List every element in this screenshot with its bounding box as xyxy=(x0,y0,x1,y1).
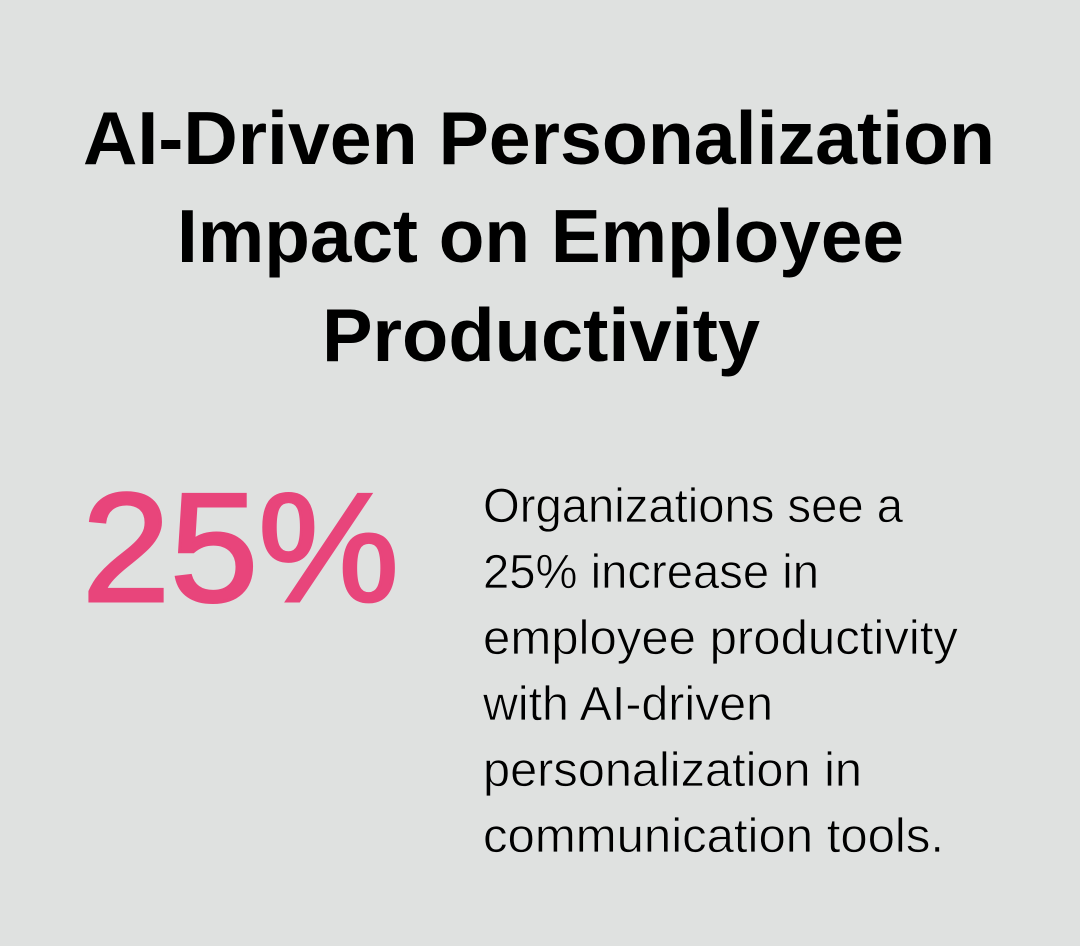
description text: communication tools. xyxy=(483,810,944,863)
description text: with AI-driven xyxy=(482,678,773,731)
description text: personalization in xyxy=(483,744,862,797)
description text: employee productivity xyxy=(483,612,958,665)
description text: 25% increase in xyxy=(483,546,819,599)
title xyxy=(83,96,995,377)
description text xyxy=(482,480,958,863)
title: AI-Driven Personalization xyxy=(83,96,995,180)
title: Productivity xyxy=(322,293,760,377)
title: Impact on Employee xyxy=(177,194,904,278)
big statistic: 25%: 25% xyxy=(82,461,399,634)
description text: Organizations see a xyxy=(483,480,903,533)
